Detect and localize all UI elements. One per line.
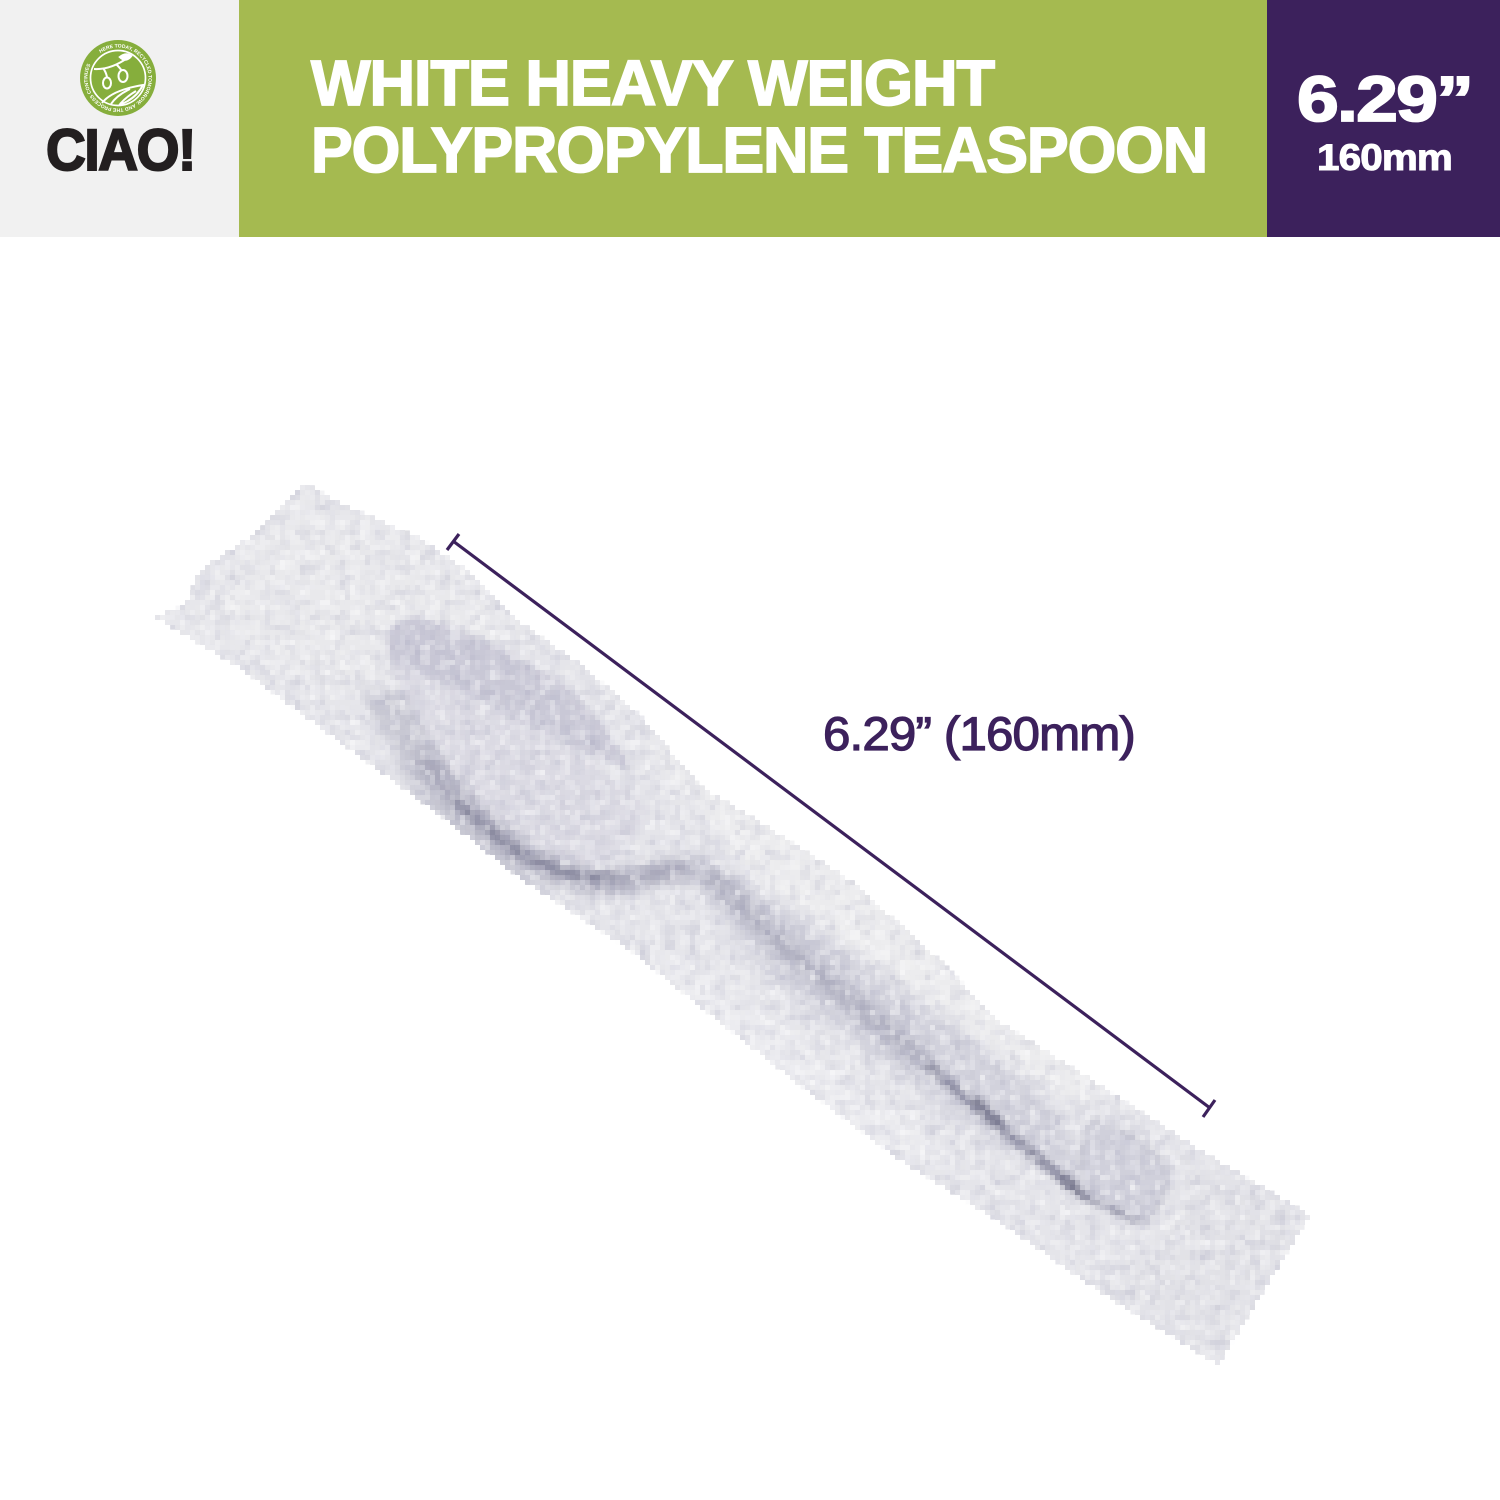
header: title panel bbox=[239, 0, 1267, 237]
icon: green recycled seal: HERE TODAY, RECYCLED TOMORROW. AND THE PROCESS CONTINUES bbox=[84, 44, 152, 112]
dimension label: 6.29” (160mm) bbox=[823, 707, 1135, 760]
packet shading bbox=[360, 542, 1213, 1116]
packet mosaic texture bbox=[140, 470, 1330, 1380]
header: size panel bbox=[1267, 0, 1500, 237]
product: wrapped teaspoon bbox=[140, 470, 1330, 1380]
spoon handle bbox=[680, 845, 1140, 1220]
spoon handle end bbox=[1082, 1120, 1165, 1222]
title: WHITE HEAVY WEIGHT bbox=[311, 47, 995, 119]
size in millimetres: 160mm bbox=[1317, 137, 1452, 178]
title bbox=[311, 47, 1207, 186]
title: POLYPROPYLENE TEASPOON bbox=[311, 114, 1207, 186]
logo wordmark: CIAO! bbox=[46, 118, 195, 183]
size in inches: 6.29” bbox=[1297, 63, 1472, 135]
dimension arrow bbox=[447, 534, 1215, 1117]
spoon bowl bbox=[385, 617, 700, 884]
header: logo panel bbox=[0, 0, 239, 237]
